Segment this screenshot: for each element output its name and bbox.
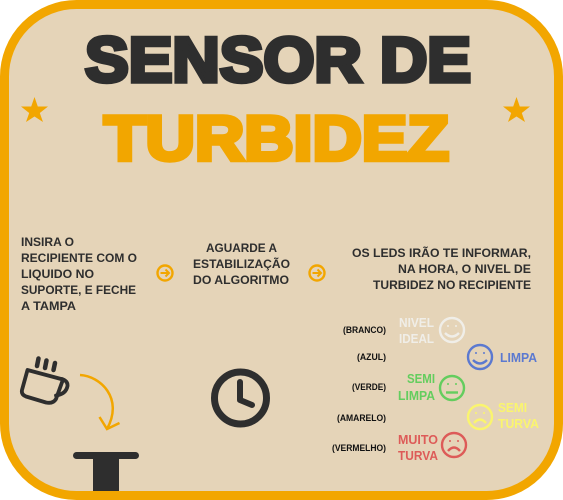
- status: limpa: [468, 345, 537, 369]
- text block: step 1: [21, 236, 137, 313]
- title: sensor de: SENSOR DE: [85, 26, 471, 96]
- label: amarelo: (AMARELO): [337, 413, 386, 423]
- text block: step 2: ESTABILIZAÇÃO: [193, 258, 290, 271]
- icon: clock: [214, 372, 266, 424]
- text block: step 2: AGUARDE A: [206, 242, 278, 255]
- text block: step 1: INSIRA O: [21, 236, 74, 249]
- status: limpa: LIMPA: [500, 351, 537, 365]
- status: muito turva: [398, 433, 466, 463]
- icon: red sad face: [442, 433, 466, 457]
- label: vermelho: (VERMELHO): [332, 443, 386, 453]
- icon: coffee cup: [22, 358, 68, 403]
- text block: step 3: [352, 247, 531, 292]
- icon: right star: [503, 97, 530, 122]
- status: nivel ideal: IDEAL: [399, 332, 434, 346]
- icon: green neutral face: [440, 376, 464, 400]
- text block: step 1: LIQUIDO NO: [21, 268, 94, 281]
- icon: yellow sad face: [468, 405, 492, 429]
- arrow: cup to stand: [80, 375, 120, 429]
- label: branco: (BRANCO): [343, 325, 386, 335]
- status: semi limpa: LIMPA: [398, 389, 435, 403]
- title: turbidez: TURBIDEZ: [104, 104, 449, 174]
- status: nivel ideal: [399, 316, 464, 346]
- text block: step 2: DO ALGORITMO: [193, 274, 289, 287]
- text block: step 3: OS LEDS IRÃO TE INFORMAR,: [352, 247, 531, 260]
- text block: step 1: SUPORTE, E FECHE: [21, 284, 136, 297]
- status: semi turva: SEMI: [498, 401, 527, 415]
- text block: step 2: [193, 242, 290, 287]
- status: muito turva: MUITO: [398, 433, 438, 447]
- status: semi limpa: SEMI: [407, 372, 435, 386]
- icon: arrow step 1 to 2: [158, 266, 172, 280]
- status: semi turva: TURVA: [498, 417, 539, 431]
- text block: step 1: A TAMPA: [21, 300, 77, 313]
- icon: support stand: [73, 452, 139, 491]
- status: semi turva: [468, 401, 539, 431]
- text block: step 3: TURBIDEZ NO RECIPIENTE: [373, 279, 531, 292]
- text block: step 1: RECIPIENTE COM O: [21, 252, 137, 265]
- icon: arrow step 2 to 3: [310, 266, 324, 280]
- icon: white smile: [440, 318, 464, 342]
- status: muito turva: TURVA: [398, 449, 438, 463]
- label: azul: (AZUL): [357, 352, 386, 362]
- text block: step 3: NA HORA, O NIVEL DE: [398, 263, 531, 276]
- status: semi limpa: [398, 372, 464, 403]
- label: verde: (VERDE): [352, 382, 386, 392]
- status: nivel ideal: NIVEL: [399, 316, 434, 330]
- icon: left star: [21, 97, 48, 122]
- icon: blue smile: [468, 345, 492, 369]
